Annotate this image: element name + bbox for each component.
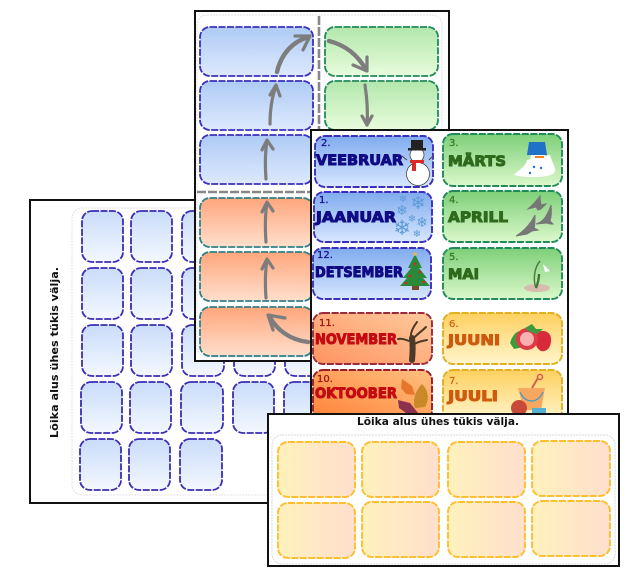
icon: snowflakes: ❄: [413, 229, 421, 240]
arrow: up, third card: [262, 140, 273, 179]
icon: snowflakes: [393, 193, 428, 240]
sheet: blue blank square cards: [30, 200, 330, 503]
card: Märts: 3.: [449, 138, 459, 149]
card: Mai: MAI: [448, 267, 479, 283]
card: Veebruar: [315, 136, 433, 187]
card: Juuni: 6.: [449, 319, 459, 330]
card: Aprill: [443, 191, 562, 242]
card: Juuni: [443, 313, 562, 364]
card: Juuli: [443, 370, 562, 421]
card: Mai: [443, 248, 562, 299]
card: Oktoober: 10.: [317, 374, 333, 385]
card: Juuni: JUUNI: [447, 333, 500, 349]
card: Veebruar: VEEBRUAR: [316, 153, 403, 169]
card: Aprill: 4.: [449, 195, 459, 206]
card: November: 11.: [319, 318, 335, 329]
card: Jaanuar: [314, 192, 432, 242]
instruction: rotated cutting note: Lõika alus ühes tükis välja.: [48, 267, 61, 438]
card: Märts: MÄRTS: [448, 153, 506, 170]
card: Detsember: 12.: [317, 250, 333, 261]
card: Mai: 5.: [449, 252, 459, 263]
icon: snowman: [402, 140, 433, 186]
arrow: down, green card: [362, 85, 372, 125]
card: Aprill: APRILL: [448, 210, 508, 226]
icon: bare tree: [398, 322, 427, 360]
card: Oktoober: [313, 370, 432, 421]
arrow: curving up left: [268, 315, 308, 342]
icon: snowdrop: [524, 261, 550, 292]
icon: flying birds: [516, 196, 553, 236]
grid of blank yellow cards: [278, 441, 610, 558]
card: Märts: [443, 134, 562, 186]
card: Juuli: 7.: [449, 376, 459, 387]
card: Juuli: JUULI: [447, 389, 498, 405]
card: November: NOVEMBER: [315, 332, 397, 348]
card: Veebruar: 2.: [321, 138, 331, 149]
card: November: [313, 313, 432, 364]
card: Jaanuar: JAANUAR: [315, 210, 396, 226]
card: Oktoober: OKTOOBER: [315, 386, 397, 402]
icon: melting snowman with bucket: [514, 142, 555, 177]
icon: strawberries: [510, 324, 551, 351]
icon: snowflakes: ❄: [408, 214, 416, 225]
sheet: month cards: [311, 130, 568, 421]
icon: autumn leaves: [398, 379, 428, 413]
icon: beach bucket and ball: [511, 374, 546, 416]
icon: snowflakes: ❄: [396, 203, 408, 219]
card: Detsember: DETSEMBER: [315, 265, 403, 281]
icon: snowflakes: ❄: [399, 194, 407, 205]
icon: christmas tree: [400, 252, 430, 290]
grid of blank blue cards: [80, 211, 326, 490]
arrow: up, orange card one: [262, 202, 273, 242]
arrow: up, orange card two: [262, 259, 273, 298]
arrow: curving down right: [329, 41, 367, 71]
icon: snowflakes: ❄: [416, 215, 428, 231]
sheet: yellow blank cards: [268, 414, 619, 566]
arrow: up and curving right: [277, 36, 310, 72]
title: Lõika alus ühes tükis välja.: [357, 415, 519, 428]
card: Jaanuar: 1.: [319, 195, 329, 206]
card: Detsember: [313, 248, 431, 299]
orange autumn cards: [200, 198, 313, 356]
arrow: up, second card: [270, 85, 280, 124]
blue winter cards: [200, 27, 313, 184]
sheet: seasonal cycle with arrows: [195, 11, 449, 361]
green spring cards: [325, 27, 438, 130]
icon: snowflakes: ❄: [393, 216, 411, 240]
icon: snowflakes: ❄: [410, 193, 426, 214]
